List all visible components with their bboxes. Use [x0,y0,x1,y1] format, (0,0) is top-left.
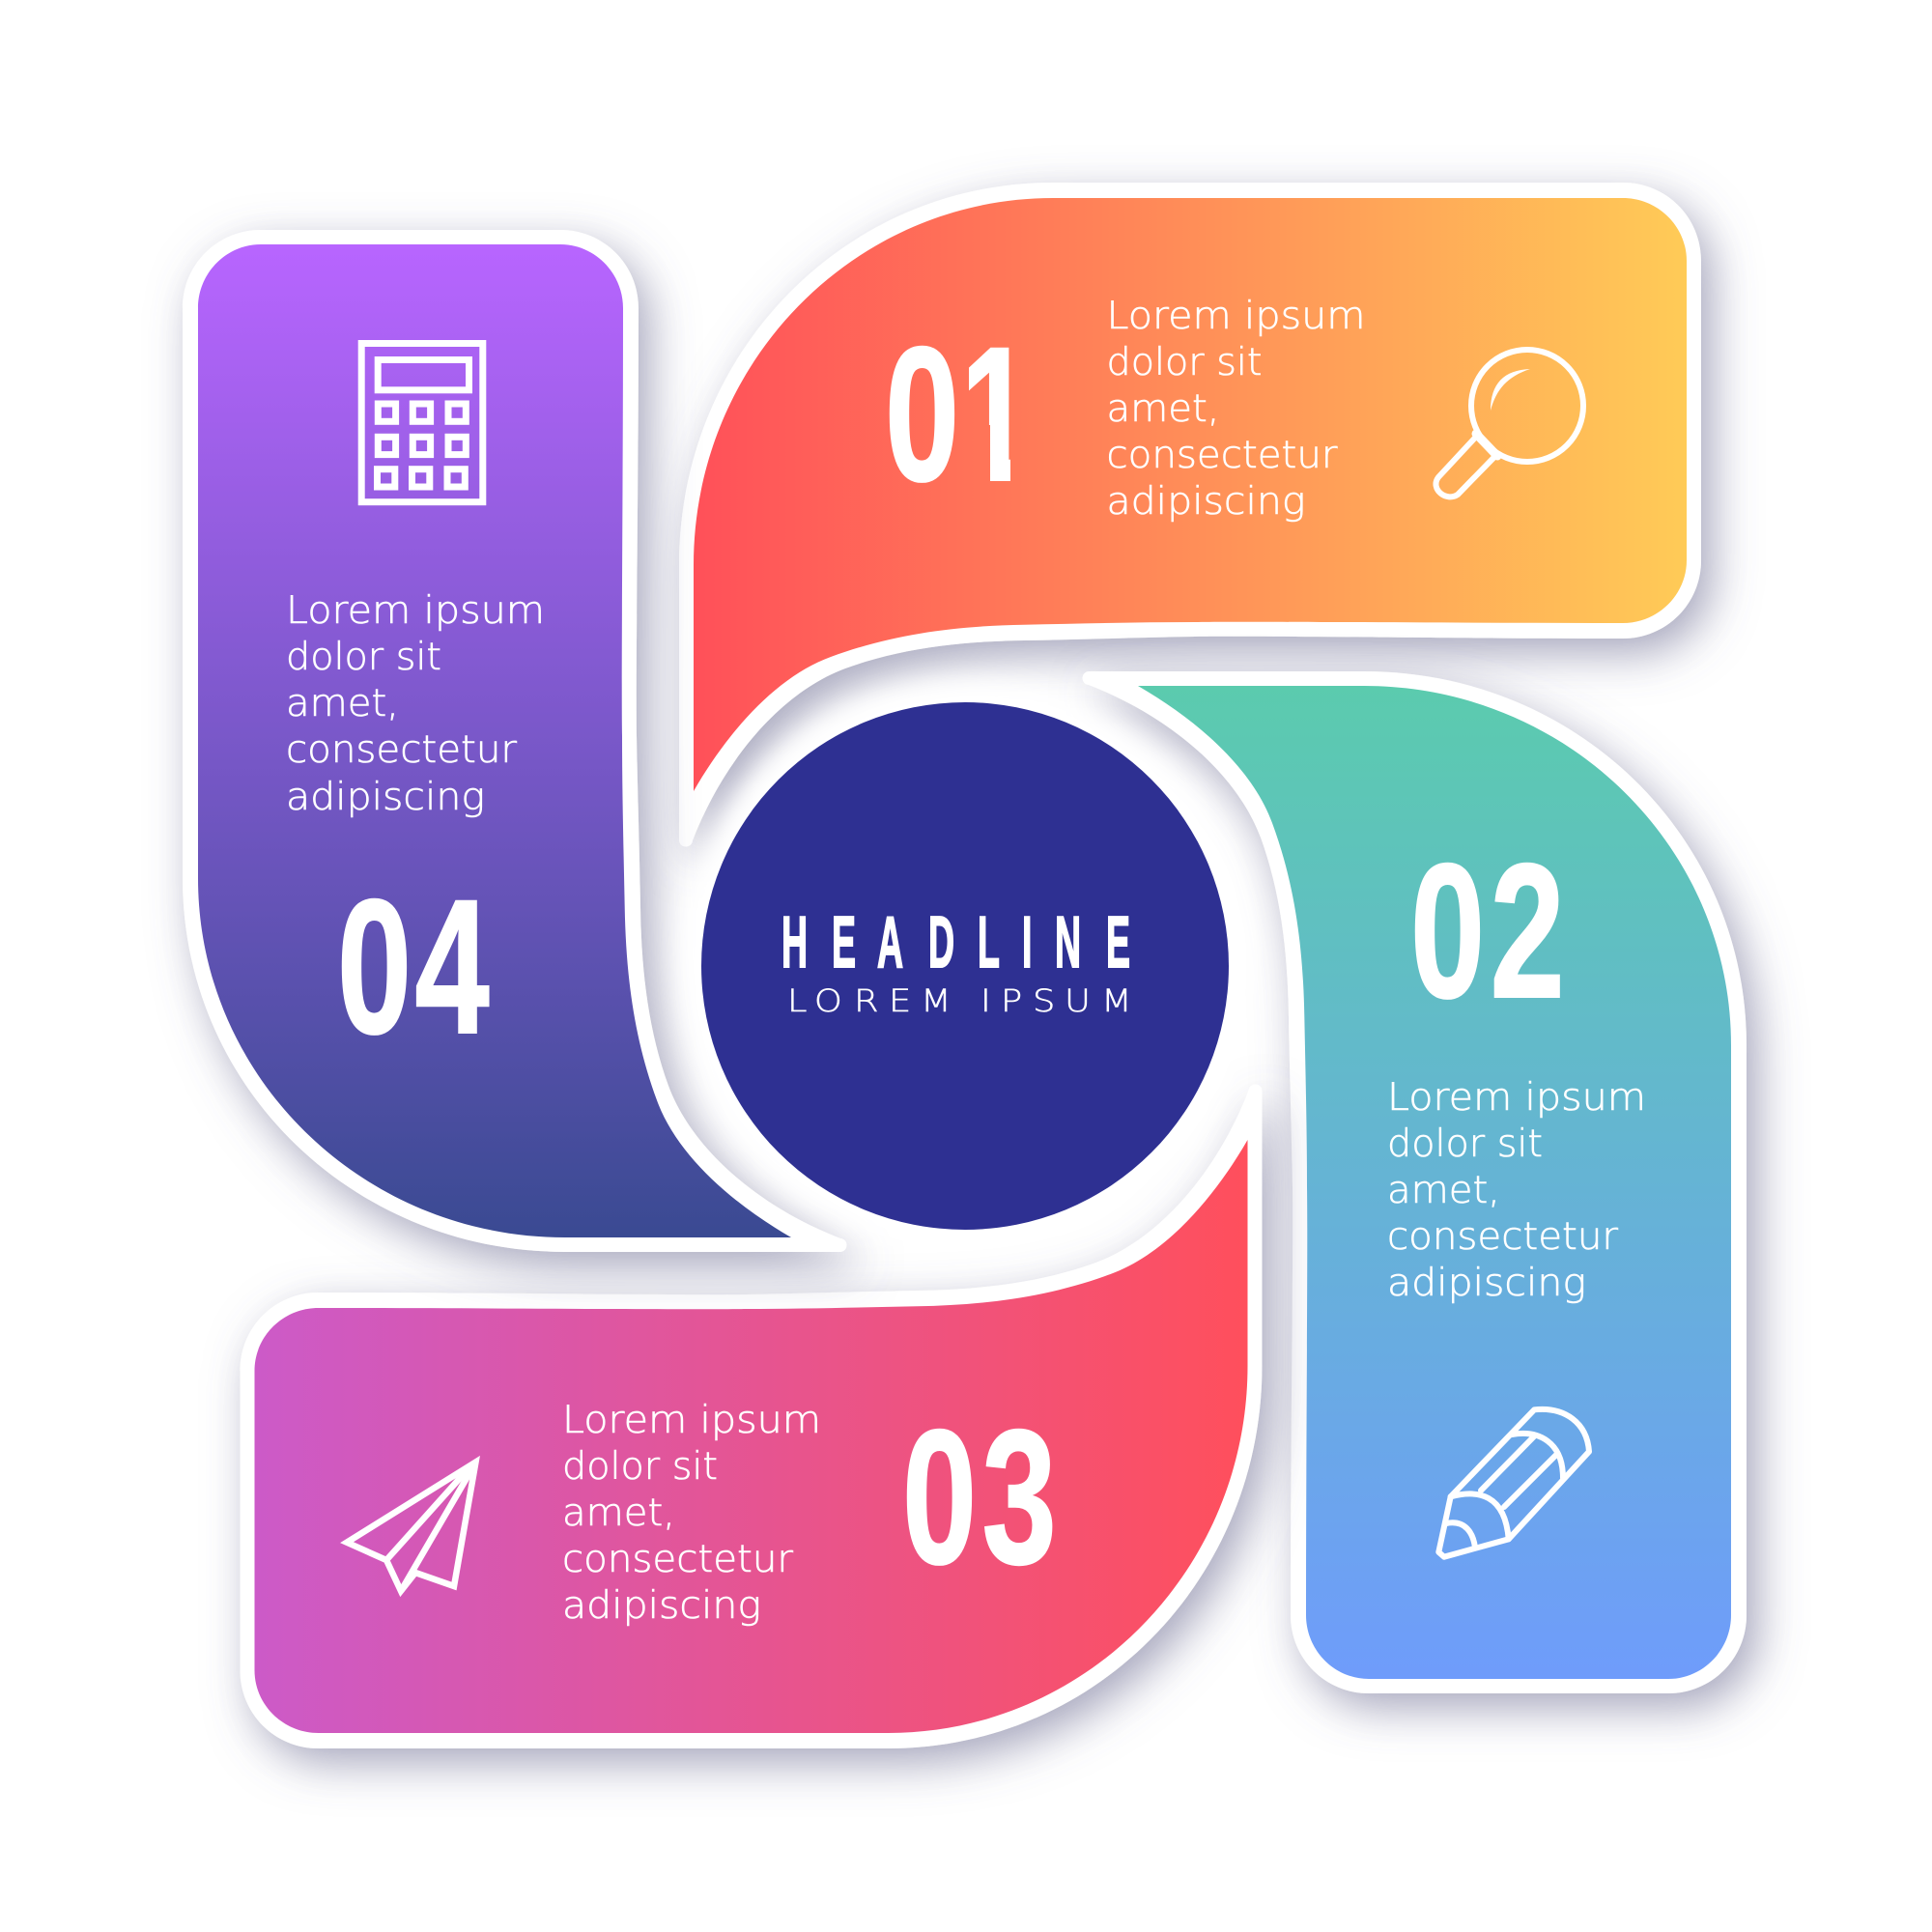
subheadline: LOREMIPSUM [787,983,1132,1019]
icon: magnifier [1435,350,1583,497]
text 1: amet, [1107,387,1219,431]
number 04: 04 [337,861,490,1074]
panel 4 [198,244,791,1237]
text 2: amet, [1387,1169,1500,1212]
circle glow [683,684,1247,1248]
panel 1 [694,198,1687,791]
text 1: adipiscing [1107,480,1306,524]
icon: paper plane [347,1463,475,1591]
text 3 [562,1399,821,1628]
panel outlines with shadow [183,183,1747,1748]
headline: HEADLINE [781,901,1130,982]
text 2: Lorem ipsum [1387,1076,1646,1120]
text 4: consectetur [286,728,517,772]
text 3: adipiscing [562,1584,761,1628]
panel 3 [255,1140,1248,1733]
icon: calculator [361,344,483,502]
text 4: Lorem ipsum [286,589,545,633]
center circle [701,702,1229,1230]
text 3: Lorem ipsum [562,1399,821,1442]
text 1: Lorem ipsum [1107,295,1366,338]
text 3: amet, [562,1492,675,1535]
text 1: dolor sit [1107,341,1262,384]
text 4 [286,589,545,819]
text 1: consectetur [1107,434,1337,477]
text 4: amet, [286,682,399,725]
text 2 [1387,1076,1646,1305]
text 1 [1107,295,1366,524]
text 3: dolor sit [562,1445,718,1489]
number 02: 02 [1410,825,1565,1038]
text 4: adipiscing [286,776,485,819]
text 2: dolor sit [1387,1122,1543,1166]
number 01: 01 [885,308,1033,522]
panel 2 [1138,686,1731,1679]
icon: pencil [1438,1409,1589,1557]
text 2: consectetur [1387,1215,1618,1259]
text 2: adipiscing [1387,1262,1586,1305]
number 03: 03 [902,1391,1057,1605]
text 3: consectetur [562,1538,793,1581]
text 4: dolor sit [286,636,441,679]
